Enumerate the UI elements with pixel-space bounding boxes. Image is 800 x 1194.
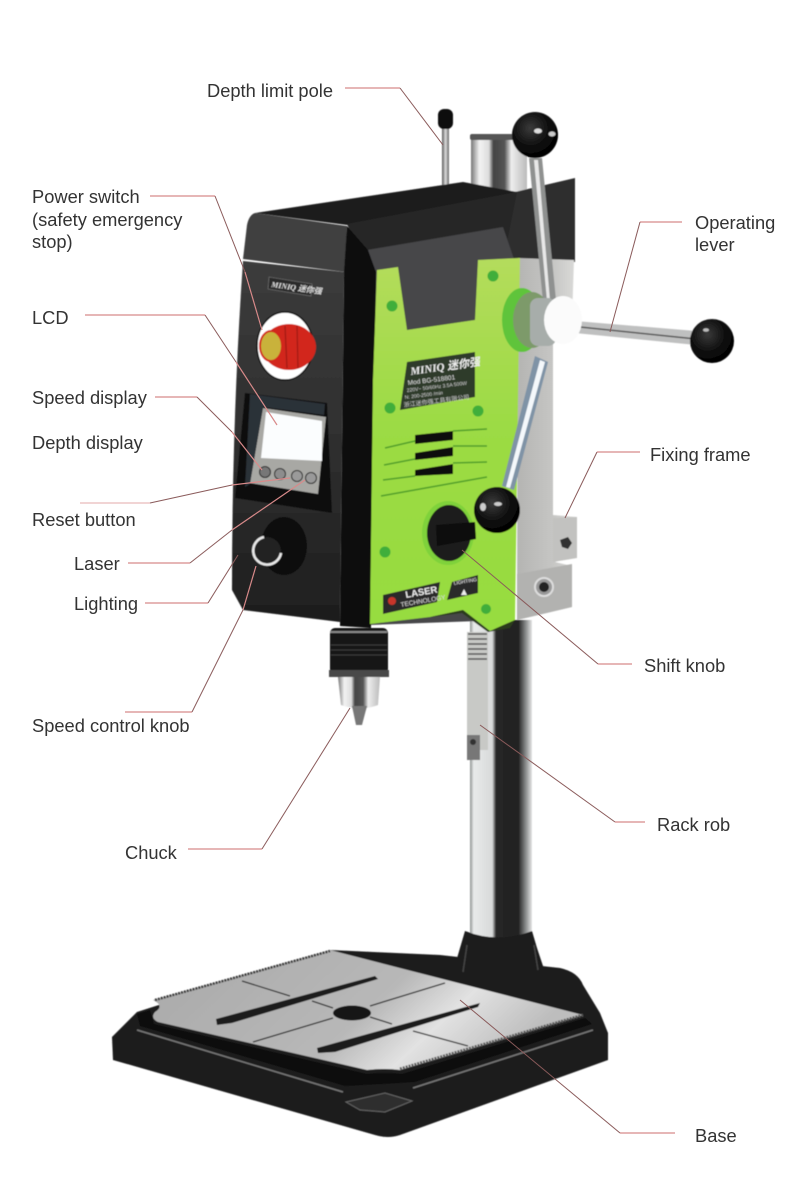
label: operating lever	[695, 212, 775, 255]
label: power switch: stop)	[32, 231, 73, 252]
leader line: LCD	[85, 315, 277, 425]
lighting badge: LIGHTING	[453, 577, 478, 587]
leader line: base	[460, 1000, 675, 1133]
head rear housing	[503, 178, 575, 262]
nameplate: Mod BG-518801	[407, 374, 456, 387]
operating lever	[474, 112, 734, 533]
leader line: speed control knob	[125, 566, 256, 712]
LCD display	[235, 393, 332, 513]
label: base: Base	[695, 1125, 737, 1146]
black corner strip	[340, 226, 376, 628]
head top	[255, 182, 517, 225]
leader line: chuck	[188, 708, 350, 849]
head front upper face	[243, 213, 347, 272]
nameplate: MINIQ 迷你强	[409, 355, 482, 378]
label: reset button: Reset button	[32, 509, 136, 530]
nameplate: 浙江迷你强工具有限公司	[403, 393, 470, 409]
spindle top	[470, 134, 527, 193]
nameplate: N: 200-2500 /min	[405, 390, 444, 401]
shift knob	[422, 501, 476, 565]
lever ball top	[512, 112, 558, 158]
nameplate: 220V~ 50/60Hz 3.5A 500W	[407, 381, 468, 394]
label: depth limit pole: Depth limit pole	[207, 80, 333, 101]
leader line: lighting	[145, 555, 238, 603]
vents	[381, 429, 487, 496]
label: speed display: Speed display	[32, 387, 148, 408]
speed control knob	[253, 517, 307, 575]
label: rack rob: Rack rob	[657, 814, 730, 835]
column collar	[453, 931, 545, 982]
base	[112, 950, 608, 1137]
table plate	[153, 950, 583, 1070]
label: power switch	[32, 186, 183, 252]
label: lighting: Lighting	[74, 593, 138, 614]
label: shift knob: Shift knob	[644, 655, 725, 676]
chuck	[329, 628, 389, 725]
label: power switch: Power switch	[32, 186, 140, 207]
leader line: rack rob	[480, 725, 645, 822]
laser badge: LASER	[405, 585, 438, 601]
head side upper panel	[367, 227, 515, 625]
brand label: MINIQ 迷你强	[270, 280, 323, 296]
silver frame	[517, 258, 577, 620]
leader line: reset button	[80, 478, 290, 503]
label: operating lever: Operating	[695, 212, 775, 233]
green panel	[370, 258, 520, 632]
column	[467, 620, 532, 945]
lever ball lower	[474, 487, 520, 533]
leader line: power switch	[150, 196, 262, 330]
label: chuck: Chuck	[125, 842, 178, 863]
lever ball right	[690, 319, 734, 363]
label: laser: Laser	[74, 553, 120, 574]
label: power switch: (safety emergency	[32, 209, 183, 230]
product: bench drill press	[112, 109, 734, 1137]
head side band	[347, 192, 517, 270]
leader line: depth limit pole	[345, 88, 443, 145]
leader line: laser	[128, 480, 305, 563]
label: depth display: Depth display	[32, 432, 144, 453]
leader line: shift knob	[462, 550, 632, 664]
laser badge: TECHNOLOGY	[400, 594, 447, 609]
label: fixing frame: Fixing frame	[650, 444, 751, 465]
leader line: speed display	[155, 397, 262, 470]
power switch	[257, 312, 316, 380]
head front lower face	[232, 261, 344, 622]
leader line: operating lever	[610, 222, 682, 332]
label: LCD: LCD	[32, 307, 69, 328]
nameplate	[400, 352, 482, 410]
laser badge	[383, 582, 447, 614]
label: operating lever: lever	[695, 234, 735, 255]
depth limit pole	[438, 109, 453, 188]
lighting badge	[447, 575, 478, 600]
label: speed control knob: Speed control knob	[32, 715, 190, 736]
leader line: fixing frame	[565, 452, 640, 518]
